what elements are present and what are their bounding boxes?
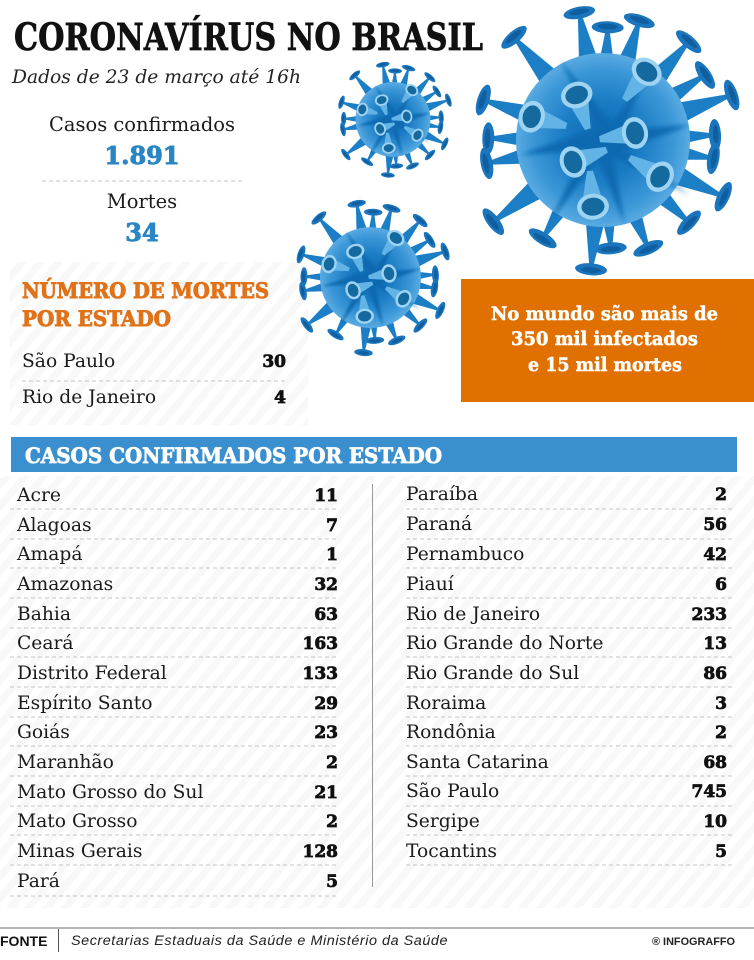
table: states left column: Distrito Federal [17,663,167,684]
table: states right column: 233 [692,605,727,625]
table: states left column: Goiás [17,722,70,743]
panel: deaths by state: 30 [262,352,286,372]
table: states right column: 6 [715,575,727,595]
table: states left column: 23 [314,723,338,743]
table: states right column: Piauí [406,574,455,595]
icon: medium virus [295,199,451,357]
table: states left column: 2 [326,812,338,832]
panel: deaths by state [22,278,288,408]
panel: deaths by state: POR ESTADO [22,306,171,331]
table: states right column: São Paulo [406,781,499,802]
table: states right column: 5 [715,842,727,862]
table: states right column: 68 [703,753,727,773]
subtitle: Dados de 23 de março até 16h [11,66,301,88]
table: states left column: 21 [314,783,338,803]
footer: source: FONTE [0,933,47,949]
table: states left column: 7 [326,516,338,536]
table: states left column: Pará [17,871,60,892]
table: states right column: 86 [703,664,727,684]
table: states left column: 29 [314,694,338,714]
table: states right column: 13 [703,634,727,654]
table: states right column: Sergipe [406,811,480,832]
callout: world numbers: No mundo são mais de [491,303,718,325]
icon: small virus [337,61,453,178]
table: states right column: Tocantins [406,841,497,862]
callout: world numbers [461,279,754,402]
table: states left column: 63 [314,605,338,625]
table: states left column: 11 [314,486,338,506]
table: states right column: Rio Grande do Norte [406,633,604,654]
table: states right column: 56 [703,515,727,535]
table: states left column: Mato Grosso [17,811,138,832]
header bar: cases by state: CASOS CONFIRMADOS POR ESTADO [25,443,442,468]
header bar: cases by state [11,437,737,472]
icon: large virus [473,4,743,277]
table: states left column: Ceará [17,633,74,654]
striped background: deaths panel [10,262,308,425]
table: states left column: Amazonas [16,574,113,595]
table: states right column: Rio Grande do Sul [406,663,579,684]
table: states left column: 1 [326,545,338,565]
stat: confirmed cases: Casos confirmados [49,113,235,136]
table: states right column: 10 [703,812,727,832]
table: states right column: Rondônia [406,722,496,743]
table: states left column: Acre [16,485,61,506]
table: states left column: 5 [326,872,338,892]
stat: deaths [107,190,177,247]
table: states right column: Roraima [406,693,486,714]
panel: deaths by state: NÚMERO DE MORTES [22,278,269,303]
table: states right column: 2 [715,723,727,743]
table: states right column: 745 [692,782,727,802]
table: states left column: 32 [314,575,338,595]
table: states left column: Minas Gerais [17,841,142,862]
table: states right column: Pernambuco [406,544,524,565]
table: states left column: Bahia [17,604,71,625]
table: states left column: 128 [302,842,338,862]
table: states left column: Maranhão [17,752,114,773]
footer: source: Secretarias Estaduais da Saúde e Ministério da Saúde [71,933,448,948]
table: states left column: 163 [302,634,338,654]
striped background: state table [0,476,754,908]
table: states right column: Santa Catarina [406,752,549,773]
table: states left column: Amapá [16,544,82,565]
footer: credit: ® INFOGRAFFO [652,936,735,948]
table: states left column: Mato Grosso do Sul [17,782,203,803]
stat: deaths: Mortes [107,190,177,213]
table: states left column: Alagoas [16,515,92,536]
table: states right column: 2 [715,485,727,505]
callout: world numbers: 350 mil infectados [511,328,698,350]
table: states left column: Espírito Santo [17,693,153,714]
table: states right column: Rio de Janeiro [406,604,540,625]
stat: confirmed cases [49,113,235,170]
stat: deaths: 34 [125,218,159,247]
callout: world numbers: e 15 mil mortes [528,354,682,376]
table: states left column [10,485,338,896]
table: states right column: Paraíba [406,484,478,505]
panel: deaths by state: 4 [274,388,286,408]
table: states left column: 133 [302,664,338,684]
panel: deaths by state: Rio de Janeiro [22,387,156,408]
table: states right column: Paraná [406,514,472,535]
panel: deaths by state: São Paulo [22,351,115,372]
table: states right column: 3 [715,694,727,714]
table: states right column [406,484,733,865]
stat: confirmed cases: 1.891 [104,141,180,170]
table: states right column: 42 [703,545,727,565]
table: states left column: 2 [326,753,338,773]
title: CORONAVÍRUS NO BRASIL [14,15,483,59]
footer: source [0,929,448,952]
